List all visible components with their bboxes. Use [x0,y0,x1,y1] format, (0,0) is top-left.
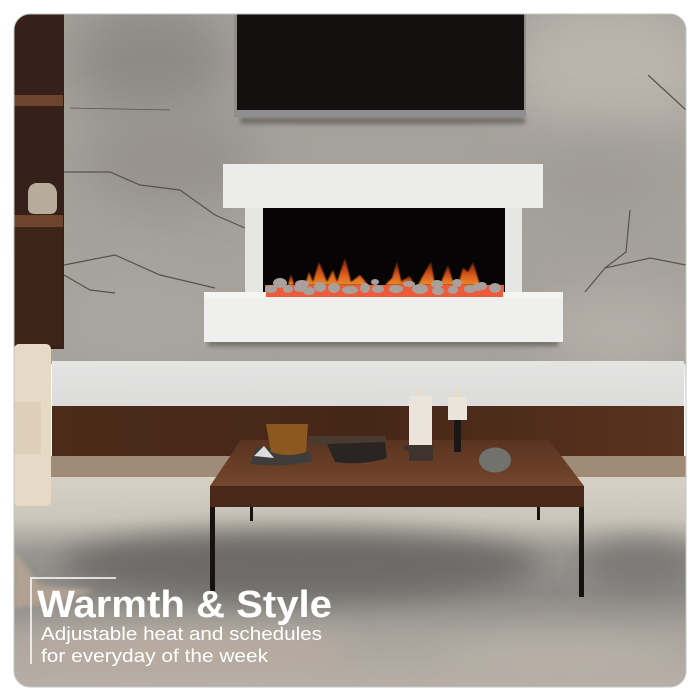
subtitle line two: for everyday of the week [41,646,269,666]
firebox [263,208,505,296]
candle: large [403,386,433,461]
armchair [14,344,51,506]
subtitle: Adjustable heat and schedules [41,624,322,644]
flames [288,258,480,285]
rug fold at left [14,550,95,608]
ember bed [265,285,504,297]
stone wall [14,0,700,370]
title: Warmth & Style [37,584,332,626]
tray and glass [250,424,313,465]
small sphere [479,448,511,472]
fireplace shadow [208,340,558,346]
base shelf [204,297,563,342]
wood plinth [52,406,684,456]
rug [10,477,700,687]
electric fireplace [204,164,563,346]
right pillar [505,208,522,298]
icon: vase [28,183,57,214]
white ledge [52,361,684,406]
top mantel [223,164,543,208]
pebbles [265,278,501,295]
table legs [210,506,215,591]
coffee table [210,440,584,597]
left pillar [245,208,263,298]
shelving unit [14,14,64,349]
books and bowl [308,436,387,463]
candle: small [448,387,467,452]
table top [210,440,584,486]
floor [14,456,686,478]
heading bracket [31,578,116,664]
table edge [210,486,584,507]
television [234,14,526,124]
